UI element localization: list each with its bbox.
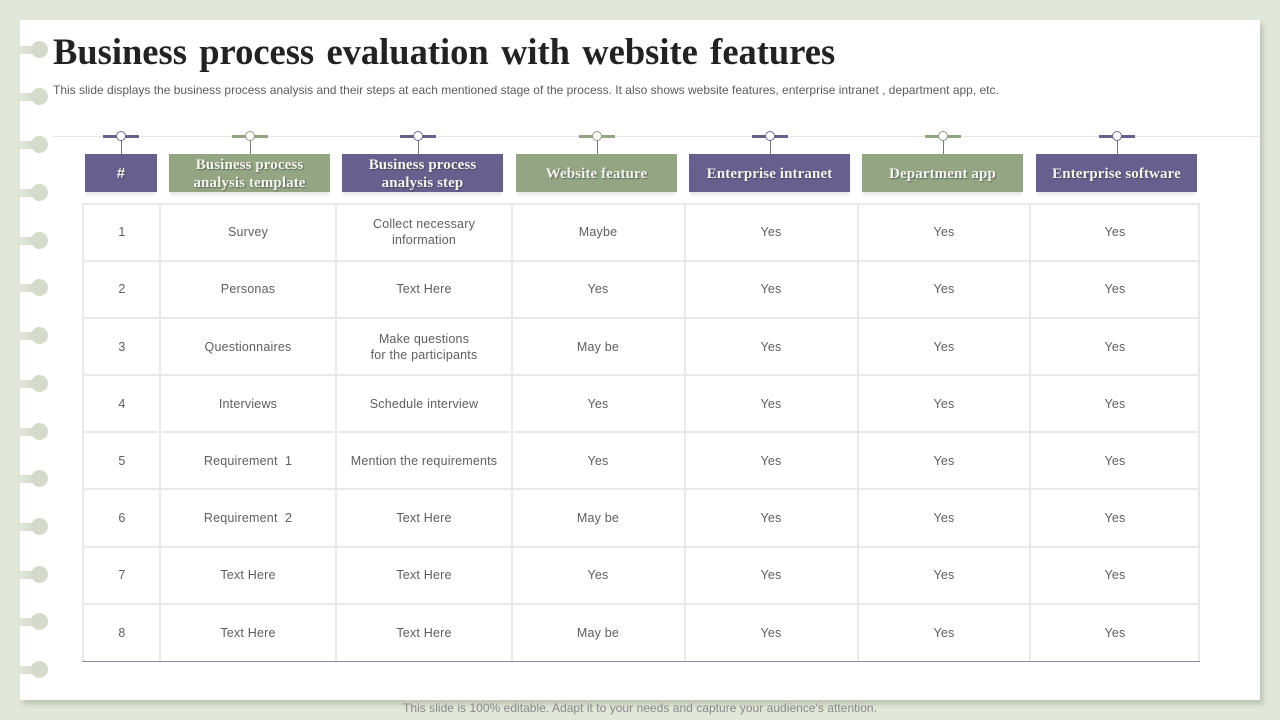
- header: Website feature: [516, 154, 677, 192]
- data table: Requirement 1: [204, 454, 292, 468]
- data table: May be: [577, 626, 619, 640]
- data table: Yes: [934, 340, 954, 354]
- data table: Yes: [934, 568, 954, 582]
- column pins: [103, 131, 1135, 154]
- data table: Yes: [934, 225, 954, 239]
- header: #: [85, 154, 157, 192]
- data table: Yes: [1104, 626, 1126, 640]
- data table: Interviews: [219, 397, 277, 411]
- data table: Yes: [588, 454, 608, 468]
- data table: Yes: [760, 454, 782, 468]
- data table: Text Here: [396, 511, 452, 525]
- data table: Text Here: [396, 568, 452, 582]
- data table: Yes: [934, 454, 954, 468]
- data table: Yes: [934, 282, 954, 296]
- data table: Mention the requirements: [351, 454, 497, 468]
- header: Business process analysis template: analysis template: [193, 174, 306, 190]
- data table: 2: [118, 282, 126, 296]
- data table: for the participants: [371, 348, 477, 362]
- data table: Yes: [760, 340, 782, 354]
- data table: Questionnaires: [205, 340, 291, 354]
- header: Department app: [862, 154, 1023, 192]
- data table: 1: [118, 225, 126, 239]
- data table: Yes: [588, 568, 608, 582]
- header: Enterprise software: [1036, 154, 1197, 192]
- header: #: #: [117, 164, 125, 182]
- data table: Yes: [934, 511, 954, 525]
- timeline line: [53, 136, 1260, 137]
- data table: 5: [118, 454, 126, 468]
- data table: Yes: [588, 397, 608, 411]
- data table: information: [392, 233, 456, 247]
- data table: Yes: [760, 511, 782, 525]
- data table: Yes: [934, 397, 954, 411]
- data table: Yes: [760, 225, 782, 239]
- binder knobs: [20, 41, 48, 678]
- header: Enterprise intranet: Enterprise intranet: [707, 166, 832, 182]
- data table: Requirement 2: [204, 511, 292, 525]
- data table: Yes: [934, 626, 954, 640]
- header: Business process analysis step: [342, 154, 503, 192]
- data table: Yes: [588, 282, 608, 296]
- data table: Yes: [760, 397, 782, 411]
- data table: Yes: [760, 626, 782, 640]
- header: Business process analysis template: Business process: [196, 156, 303, 172]
- data table: Text Here: [396, 626, 452, 640]
- header: Enterprise intranet: [689, 154, 850, 192]
- data table: 4: [118, 397, 126, 411]
- data table: Yes: [1104, 511, 1126, 525]
- header: Website feature: Website feature: [546, 166, 647, 182]
- header: Business process analysis step: analysis step: [382, 174, 463, 190]
- header: Enterprise software: Enterprise software: [1052, 166, 1181, 182]
- data table: Yes: [760, 282, 782, 296]
- data table: Text Here: [220, 568, 276, 582]
- data table: Survey: [228, 225, 268, 239]
- data table: Yes: [1104, 568, 1126, 582]
- data table: 3: [118, 340, 126, 354]
- data table: Yes: [1104, 225, 1126, 239]
- header: Business process analysis step: Business process: [369, 156, 476, 172]
- data table: 7: [118, 568, 126, 582]
- header: Department app: Department app: [889, 166, 996, 182]
- data table: Text Here: [220, 626, 276, 640]
- data table: Yes: [1104, 340, 1126, 354]
- data table: May be: [577, 340, 619, 354]
- footer note: This slide is 100% editable. Adapt it to your needs and capture your audience's attention.: [403, 701, 877, 715]
- data table: Yes: [1104, 454, 1126, 468]
- data table: Maybe: [579, 225, 617, 239]
- data table: Yes: [1104, 397, 1126, 411]
- data table: Make questions: [379, 332, 469, 346]
- data table: Collect necessary: [373, 217, 475, 231]
- header: Business process analysis template: [169, 154, 330, 192]
- data table: Text Here: [396, 282, 452, 296]
- data table: Yes: [1104, 282, 1126, 296]
- data table: Yes: [760, 568, 782, 582]
- data table: 6: [118, 511, 126, 525]
- data table: May be: [577, 511, 619, 525]
- title: Business process evaluation with website features: [53, 31, 835, 72]
- subtitle: This slide displays the business process analysis and their steps at each mentioned stage of the process. It also shows website features, enterprise intranet , department app, etc.: [53, 83, 999, 97]
- data table: Personas: [221, 282, 275, 296]
- data table: Schedule interview: [370, 397, 478, 411]
- data table: 8: [118, 626, 126, 640]
